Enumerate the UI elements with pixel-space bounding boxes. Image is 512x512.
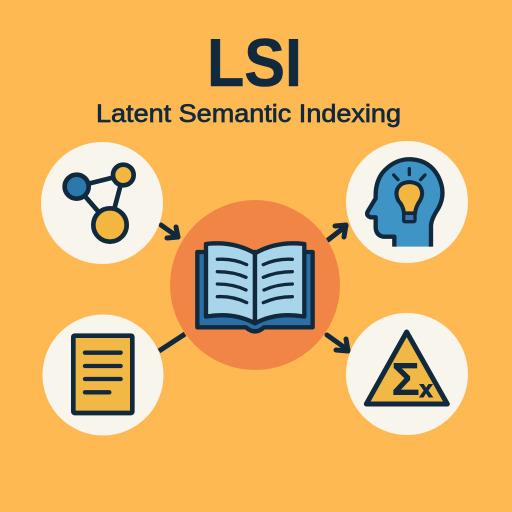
panel: network bbox=[41, 142, 163, 264]
panel: head with lightbulb bbox=[346, 141, 468, 263]
title: LSI bbox=[207, 25, 302, 101]
arrow: book to head bbox=[328, 225, 346, 240]
icon: triangle with sigma: Σ bbox=[392, 355, 419, 404]
icon: triangle with sigma bbox=[366, 332, 447, 404]
icon: network graph bbox=[65, 165, 134, 242]
icon: triangle with sigma: x bbox=[420, 376, 433, 402]
icon: document bbox=[73, 336, 132, 413]
subtitle: Latent Semantic Indexing bbox=[96, 100, 401, 128]
icon: head with lightbulb bbox=[367, 159, 442, 247]
connector: document to book bbox=[159, 334, 185, 351]
panel: central book bbox=[170, 200, 340, 370]
arrow: network to book bbox=[161, 225, 178, 238]
arrow: book to formula bbox=[327, 335, 348, 351]
panel: formula bbox=[346, 313, 468, 435]
icon: open book bbox=[197, 243, 313, 331]
panel: document bbox=[42, 314, 164, 436]
